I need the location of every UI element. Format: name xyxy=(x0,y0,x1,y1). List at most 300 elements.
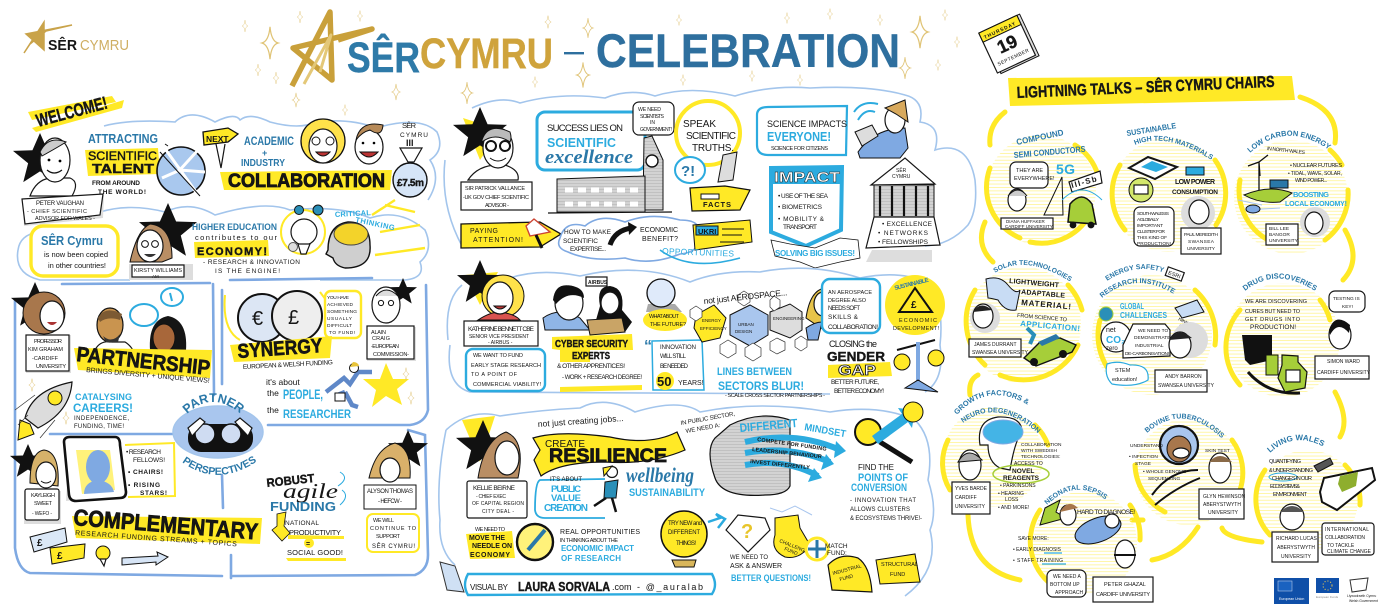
text: novel reagents: • AND MORE! xyxy=(998,505,1029,511)
icon: sustainable economic development xyxy=(885,275,945,335)
icon: next sign xyxy=(203,128,238,168)
bubble: bottom up: APPROACH xyxy=(1055,590,1083,596)
text: quantifying changes: & UNDERSTANDING xyxy=(1269,468,1313,474)
bubble: stem education xyxy=(1106,362,1148,385)
text: nuclear tidal wave xyxy=(1285,163,1347,208)
card: UKRI xyxy=(693,220,752,250)
text: higher education economy xyxy=(192,222,300,275)
text: closing the gender gap: BETTER FUTURE, xyxy=(831,379,879,386)
bubble: Sêr Cymru copied xyxy=(31,226,118,276)
bubble: early stage research: EARLY STAGE RESEARCH xyxy=(471,363,541,369)
icon: wind turbine island xyxy=(1238,155,1292,213)
bubble: scientists in government: IN xyxy=(650,120,655,126)
text: lines between sectors blur: SECTORS BLUR! xyxy=(718,379,804,393)
label: low power consumption xyxy=(1172,167,1218,196)
bubble: they are everywhere: EVERYWHERE! xyxy=(1014,176,1055,182)
text: closing the gender gap: GENDER xyxy=(827,349,886,364)
bubble: continue to support: CONTINUE TO xyxy=(370,526,417,532)
text: lines between sectors blur: - SCALE CROSS SECTOR PARTNERSHIPS - xyxy=(725,393,825,399)
cloud: economic benefit question: BENEFIT? xyxy=(642,236,678,243)
quote: innovation in 50 years: WILL STILL xyxy=(660,354,687,360)
text: ask and answer better questions xyxy=(730,555,811,584)
icon: mindset head with arrows: WE NEED A: xyxy=(685,423,721,435)
icon: parliament and Big Ben xyxy=(548,136,672,213)
text: real opportunities: REAL OPPORTUNITIES xyxy=(560,529,640,536)
text: lightweight adaptable material: APPLICATION! xyxy=(1020,319,1080,333)
shield: impact list: • BIOMETRICS xyxy=(778,204,823,211)
bubble: achieved something: YOU HAVE xyxy=(327,295,349,301)
bubble: international collaboration: CLIMATE CHANGE xyxy=(1327,549,1372,555)
person: Glyn Hewinson: ABERYSTWYTH xyxy=(1203,502,1241,508)
person: Yves Barde: UNIVERSITY xyxy=(955,504,986,510)
icon: speech bubbles xyxy=(130,288,183,326)
icon: production line and bottle xyxy=(1242,335,1307,393)
text: robust agile funding xyxy=(266,471,346,514)
icon: facts folder: FACTS xyxy=(703,200,731,209)
icons: sector hexagons: URBAN xyxy=(738,322,754,327)
person: Alain Craig: CRAIG xyxy=(372,336,390,342)
bubble: achieved something: ACHIEVED xyxy=(327,302,354,308)
text: novel reagents: WITH SWEDISH xyxy=(1021,448,1058,454)
person: Peter Vaughan xyxy=(13,133,104,226)
person: Andy Barron: SWANSEA UNIVERSITY xyxy=(1158,383,1215,389)
shield: impact list: IMPACT xyxy=(774,169,840,186)
talk: growth factors and neurodegeneration: NEURO DEGENERATION xyxy=(960,408,1041,433)
talk: growth factors and neurodegeneration: GROWTH FACTORS & xyxy=(954,390,1028,414)
list: fellows chairs stars: STARS! xyxy=(140,490,167,497)
icon: challenge fund bag: FUND xyxy=(783,546,799,557)
person: Bill Lee: BANGOR xyxy=(1269,232,1290,238)
person: Peter Vaughan: PETER VAUGHAN xyxy=(36,201,84,207)
icon: cow portrait xyxy=(1160,426,1198,464)
person: Professor Kim Graham xyxy=(11,282,71,373)
text: infection and sequencing xyxy=(1129,443,1230,482)
icon: gold star xyxy=(292,12,372,86)
text: academic + industry: + xyxy=(262,148,267,158)
icon: new building xyxy=(1175,300,1204,339)
icon: brain head xyxy=(979,417,1023,470)
credit: visual by Laura Sorvala: .com xyxy=(612,582,632,592)
cloud outline xyxy=(444,87,976,246)
shield: impact list: • USE OF THE SEA xyxy=(778,193,829,200)
list: fellows chairs stars: • CHAIRS! xyxy=(128,469,163,476)
section: lightning talks heading: LIGHTNING TALKS – SÊR CYMRU CHAIRS xyxy=(1016,72,1275,102)
text: lightweight adaptable material: LIGHTWEIGHT xyxy=(1009,278,1060,289)
text: the people, the researcher: PEOPLE, xyxy=(283,386,323,402)
icon: hot air balloon: DIFFERENT xyxy=(668,530,700,536)
text: catalysing careers: FUNDING, TIME! xyxy=(74,424,124,430)
talk: sustainable high tech materials: HIGH TECH MATERIALS xyxy=(1134,136,1213,160)
bubble: South Wales: THIS KIND OF xyxy=(1137,235,1167,241)
bubble: continue to support: WE WILL xyxy=(373,518,394,524)
icon: mindset head with arrows: COMPETE FOR FUNDING xyxy=(757,437,827,453)
card: UKRI: UKRI xyxy=(698,227,716,236)
logo: Sêr Cymru small: SÊR xyxy=(48,36,77,54)
icon: needle gauge xyxy=(466,524,553,560)
text: nuclear tidal wave: • NUCLEAR FUTURES xyxy=(1290,163,1342,169)
person: Alain Craig xyxy=(367,278,417,361)
talk: sustainable high tech materials: SUSTAINABLE xyxy=(1126,121,1177,138)
person: Sir Patrick Vallance xyxy=(453,107,532,210)
text: points of conversion: CONVERSION xyxy=(851,482,907,494)
person: Alyson Thomas: ALYSON THOMAS xyxy=(367,489,413,495)
box: public value creation xyxy=(535,477,605,518)
text: opportunities xyxy=(660,246,740,263)
person: Kirsty Williams AM xyxy=(129,203,197,280)
box: science impacts everyone: SCIENCE FOR CITIZENS xyxy=(771,146,828,152)
quote: innovation in 50 years: 50 xyxy=(657,374,671,389)
icon: net CO2 zero: net xyxy=(1106,327,1116,334)
person: Diana Huffaker: CARDIFF UNIVERSITY xyxy=(1005,224,1053,229)
person: Kirsty Williams AM: AM xyxy=(152,274,159,279)
panel: welcome section xyxy=(13,93,440,280)
person: Diana Huffaker xyxy=(1001,189,1053,229)
talk: compound semiconductors xyxy=(986,127,1102,245)
text: attracting scientific talent: FROM AROUND xyxy=(92,180,140,187)
sign: paying attention: PAYING xyxy=(470,228,498,235)
bubble: achieved something: TO FUND! xyxy=(329,330,355,336)
person: James Durrant: SWANSEA UNIVERSITY xyxy=(972,350,1029,356)
person: James Durrant: JAMES DURRANT xyxy=(974,342,1017,348)
text: infection and sequencing: UNDERSTAND xyxy=(1130,443,1163,449)
banner: complementary: RESEARCH FUNDING STREAMS + TOPICS xyxy=(75,530,237,548)
bubble: stem education: education! xyxy=(1112,377,1138,383)
text: higher education economy: IS THE ENGINE! xyxy=(215,268,280,275)
icon: brain head critical thinking xyxy=(326,200,425,268)
text: lightweight adaptable material xyxy=(1009,278,1080,333)
person: Paul Meredith xyxy=(1181,196,1221,254)
person: Kellie Beirne: CITY DEAL - xyxy=(482,509,514,515)
talk: low carbon energy: IN NORTH WALES xyxy=(1267,146,1306,156)
bubble: early stage research xyxy=(466,349,545,391)
quote: innovation in 50 years xyxy=(644,338,704,390)
text: novel reagents: • PARKINSONS xyxy=(1000,483,1036,489)
icon: running researcher and star xyxy=(326,362,414,407)
icon: globe with arrows xyxy=(157,144,205,196)
icon: green solar car xyxy=(1024,328,1076,366)
icon: facts folder xyxy=(690,152,750,211)
icon: mindset head with arrows: INVEST DIFFERENTLY xyxy=(750,459,810,471)
panel: resilience and research xyxy=(439,402,934,596)
text: the people, the researcher: RESEARCHER xyxy=(283,407,351,421)
person: Yves Barde xyxy=(952,450,990,514)
person: Paul Meredith: UNIVERSITY xyxy=(1187,246,1216,252)
person: Kellie Beirne xyxy=(456,416,527,518)
person: Peter Ghazal: CARDIFF UNIVERSITY xyxy=(1096,592,1150,598)
icon: coins xyxy=(225,291,326,342)
bubble: stem education: STEM xyxy=(1115,368,1131,374)
text: national productivity and social good: = xyxy=(306,541,310,548)
talk: energy safety research institute: RESEARCH INSTITUTE xyxy=(1099,278,1176,298)
text: drug production: GET DRUGS INTO xyxy=(1245,317,1301,323)
title: CYMRU xyxy=(420,30,553,78)
title xyxy=(292,12,900,86)
bubble: they are everywhere xyxy=(1010,162,1055,188)
text: cyber security experts: & OTHER APPRENTICES! xyxy=(557,363,625,370)
text: save more xyxy=(1013,536,1066,564)
icon: net CO2 zero: zero xyxy=(1106,346,1118,352)
text: robust agile funding: agile xyxy=(283,479,338,503)
logos: EU and Welsh Government: European Funds xyxy=(1316,595,1339,599)
text: catalysing careers xyxy=(73,392,133,430)
icon: Sêr Cymru temple: • FELLOWSHIPS xyxy=(878,239,929,246)
icon: industrial fund chest: INDUSTRIAL xyxy=(832,563,862,577)
bubble: bottom up xyxy=(1047,570,1086,597)
bubble: scientists in government xyxy=(633,102,674,135)
icon: mother and baby: HARD TO DIAGNOSE! xyxy=(1077,509,1135,516)
bubble: achieved something xyxy=(325,291,361,338)
list: fellows chairs stars: • RISING xyxy=(128,482,160,489)
bubble: early stage research: WE WANT TO FUND xyxy=(473,353,523,359)
logos: EU and Welsh Government: Llywodraeth Cymru xyxy=(1347,594,1376,598)
person: Peter Vaughan: ADVISOR FOR WALES - xyxy=(35,216,95,222)
text: closing the gender gap: GAP xyxy=(838,362,876,379)
icons: sector hexagons: ENGINEERING xyxy=(773,316,805,321)
icon: new building: building! xyxy=(1177,324,1199,339)
heading: welcome xyxy=(28,93,124,132)
icon: structural fund flag: FUND xyxy=(890,572,905,578)
text: attracting scientific talent xyxy=(85,131,160,196)
banner: partnership: PARTNERSHIP xyxy=(75,343,211,380)
bubble: question marks xyxy=(675,157,705,183)
bubble: scientists in government: WE NEED xyxy=(638,107,661,113)
icon: 5G mast xyxy=(1044,177,1063,215)
icon: Sêr Cymru temple: • NETWORKS xyxy=(878,230,929,237)
icon: needle gauge: MOVE THE xyxy=(469,535,505,542)
text: save more: • EARLY DIAGNOSIS xyxy=(1013,547,1062,553)
person: Andy Barron: ANDY BARRON xyxy=(1165,374,1202,380)
bubble: achieved something: DIFFICULT xyxy=(327,323,352,329)
bubble: industrial decarbonisation: DE-CARBONISATION! xyxy=(1125,351,1169,357)
person: Katherine Bennett: KATHERINE BENNETT CBE xyxy=(468,326,535,333)
person: Glyn Hewinson xyxy=(1199,453,1246,519)
person: Glyn Hewinson: UNIVERSITY xyxy=(1208,510,1239,516)
panel: science and government xyxy=(444,87,976,268)
person: Kellie Beirne: - CHIEF EXEC xyxy=(476,494,506,500)
people: cyber security experts xyxy=(543,277,632,335)
text: the people, the researcher: it's about xyxy=(266,377,300,387)
person: Peter Ghazal: PETER GHAZAL xyxy=(1104,582,1146,588)
icon: satellite and tablet xyxy=(1314,458,1375,510)
sign: paying attention: ATTENTION! xyxy=(473,237,523,244)
text: quantifying changes: CHANGES IN OUR xyxy=(1272,476,1312,482)
text: global challenges: GLOBAL xyxy=(1120,302,1144,311)
text: higher education economy: ECONOMY! xyxy=(197,246,267,258)
credit: visual by Laura Sorvala xyxy=(465,574,715,595)
talk: compound semiconductors: SEMI CONDUCTORS xyxy=(1013,144,1086,160)
panel: partner grid lines xyxy=(15,278,428,578)
icons: sector hexagons: ENERGY xyxy=(702,318,721,323)
icon: sustainable economic development: ECONOMIC xyxy=(899,318,937,324)
ring: speak scientific truths: SPEAK xyxy=(683,119,716,130)
person: aerospace woman xyxy=(806,288,832,340)
icon: mindset head with arrows: DIFFERENT xyxy=(739,416,799,435)
banner: collaboration: COLLABORATION xyxy=(228,171,385,192)
text: infection and sequencing: STAGE xyxy=(1135,461,1151,467)
person: Sir Patrick Vallance: SIR PATRICK VALLANCE xyxy=(465,186,525,192)
icon: runner xyxy=(594,466,618,512)
banner: create resilience xyxy=(533,413,685,476)
text: real opportunities: ECONOMIC IMPACT xyxy=(561,544,634,553)
icon: device and chip xyxy=(1129,157,1177,202)
icons: sector hexagons: DESIGN xyxy=(735,329,752,334)
person: Alain Craig: ALAIN xyxy=(371,330,386,336)
ring: speak scientific truths xyxy=(676,101,740,165)
bubble: Sêr Cymru copied: is now been copied xyxy=(44,250,108,259)
icon: partner perspectives binoculars: PARTNER xyxy=(182,393,244,414)
text: quantifying changes xyxy=(1269,459,1313,498)
person: Professor Kim Graham: PROFESSOR xyxy=(34,339,62,345)
box: science impacts everyone: EVERYONE! xyxy=(767,129,831,144)
text: ask and answer better questions: ASK & ANSWER xyxy=(730,563,782,570)
text: lines between sectors blur xyxy=(717,366,825,399)
person: Professor Kim Graham: UNIVERSITY xyxy=(36,364,66,370)
talk: low carbon energy xyxy=(1234,130,1351,253)
text: infection and sequencing: • WHOLE GENOME xyxy=(1143,469,1186,475)
label: low power consumption: CONSUMPTION xyxy=(1172,189,1218,196)
quote: innovation in 50 years: BE NEEDED xyxy=(660,364,689,370)
text: novel reagents: NOVEL xyxy=(1012,468,1034,475)
text: attracting scientific talent: THE WORLD! xyxy=(98,189,146,196)
cloud: economic benefit question: EXPERTISE... xyxy=(570,246,606,253)
icon: globe xyxy=(1099,307,1113,321)
quote: innovation in 50 years: INNOVATION xyxy=(660,345,696,351)
text: wellbeing sustainability: wellbeing xyxy=(626,463,694,487)
bubble: scientists in government: SCIENTISTS xyxy=(640,114,665,120)
bubble: scientists in government: GOVERNMENT! xyxy=(640,127,672,133)
text: quantifying changes: QUANTIFYING xyxy=(1269,459,1301,465)
bubble: testing is key: KEY! xyxy=(1342,304,1353,310)
quote: innovation in 50 years: YEARS! xyxy=(678,380,704,387)
shield: impact list: • MOBILITY & xyxy=(778,216,825,223)
bubble: achieved something: SOMETHING xyxy=(327,309,357,315)
icon: net CO2 zero: CO₂ xyxy=(1106,335,1125,346)
person: Yves Barde: YVES BARDE xyxy=(955,486,988,492)
text: lightweight adaptable material: MATERIAL! xyxy=(1021,298,1071,311)
text: infection and sequencing: • INFECTION xyxy=(1129,454,1158,460)
text: wellbeing sustainability xyxy=(626,463,706,499)
text: drug production xyxy=(1245,299,1307,331)
text: points of conversion: - INNOVATION THAT xyxy=(850,498,916,504)
person: Kellie Beirne: KELLIE BEIRNE xyxy=(473,485,516,492)
text: quantifying changes: ENVIRONMENT xyxy=(1273,492,1308,498)
icon: coins: £ xyxy=(288,307,299,329)
icon: money bag £7.5m: £7.5m xyxy=(397,178,424,189)
text: wellbeing sustainability: SUSTAINABILITY xyxy=(629,487,706,499)
panel: partnership xyxy=(11,282,212,440)
person: Peter Vaughan: - CHIEF SCIENTIFIC xyxy=(27,209,87,215)
person: Bill Lee xyxy=(1266,207,1330,245)
logo: Sêr Cymru small xyxy=(24,22,129,54)
talk: sustainable high tech materials xyxy=(1110,121,1228,255)
text: cyber security experts: CYBER SECURITY xyxy=(555,338,628,350)
text: robust agile funding: ROBUST xyxy=(266,471,316,490)
person: Alyson Thomas xyxy=(364,430,428,509)
person: Kellie Beirne: OF CAPITAL REGION xyxy=(472,501,524,507)
person: Kayleigh Sweet: SWEET xyxy=(34,501,53,507)
text: infection and sequencing: SKIN TEST xyxy=(1205,448,1230,454)
heading: welcome: WELCOME! xyxy=(34,93,110,131)
text: the people, the researcher: the xyxy=(267,405,279,415)
text: nuclear tidal wave: WIND POWER... xyxy=(1295,178,1327,184)
cloud outlines xyxy=(17,115,440,280)
text: ask and answer better questions: BETTER QUESTIONS! xyxy=(731,573,811,584)
icon: portrait frame xyxy=(64,437,126,501)
bubble: bottom up: BOTTOM UP xyxy=(1050,582,1080,588)
credit: visual by Laura Sorvala: VISUAL BY xyxy=(470,583,509,592)
bubble: soft skills and collaboration: SKILLS & xyxy=(828,314,859,321)
text: catalysing careers: INDEPENDENCE, xyxy=(74,416,129,422)
icon: money bag £7.5m xyxy=(393,121,428,197)
bubble: testing is key: TESTING IS xyxy=(1333,296,1360,302)
icon: crystal ball: THE FUTURE? xyxy=(650,322,686,328)
person: Richard Lucas: ABERYSTWYTH xyxy=(1277,545,1315,551)
text: save more: SAVE MORE: xyxy=(1018,536,1049,542)
person: James Durrant xyxy=(969,303,1029,357)
person: Paul Meredith: SWANSEA xyxy=(1188,239,1215,245)
person: Alain Craig: -EUROPEAN xyxy=(371,344,399,350)
bubble: soft skills and collaboration: DEGREE ALSO xyxy=(828,298,867,304)
person: Kayleigh Sweet: - WEFO - xyxy=(32,511,52,517)
credit: visual by Laura Sorvala: LAURA SORVALA xyxy=(518,579,611,594)
callout: solving big issues: SOLVING BIG ISSUES! xyxy=(775,249,855,258)
bubble: international collaboration xyxy=(1322,523,1374,555)
person: Richard Lucas: RICHARD LUCAS xyxy=(1276,536,1318,542)
icon: bulb with gears xyxy=(281,205,325,254)
icon: hot air balloon: THINGS! xyxy=(676,541,696,547)
icon: industrial fund chest: FUND xyxy=(839,573,854,583)
text: academic + industry: INDUSTRY xyxy=(241,158,285,169)
talk: solar technologies: SOLAR TECHNOLOGIES xyxy=(993,260,1072,281)
text: nuclear tidal wave: LOCAL ECONOMY! xyxy=(1285,201,1347,208)
person: Alyson Thomas: - HEFCW - xyxy=(378,499,402,505)
person: Yves Barde: CARDIFF xyxy=(955,495,977,501)
bubble: they are everywhere: THEY ARE xyxy=(1016,168,1043,174)
icon: sustainable economic development: DEVELOPMENT! xyxy=(893,326,939,332)
text: attracting scientific talent: TALENT xyxy=(92,161,154,176)
label: III-Sb: III-Sb xyxy=(1070,174,1098,190)
text: novel reagents: LOSS xyxy=(1005,497,1019,503)
text: points of conversion xyxy=(850,463,922,522)
person: Simon Ward: CARDIFF UNIVERSITY xyxy=(1317,370,1371,376)
icon: partner perspectives binoculars xyxy=(172,393,264,475)
person: Simon Ward: SIMON WARD xyxy=(1327,359,1360,365)
people: partnership pair xyxy=(95,308,188,362)
talk: energy safety research institute xyxy=(1092,264,1218,395)
icon: match fund xyxy=(806,538,848,560)
people: cyber security experts: AIRBUS xyxy=(588,280,608,286)
icon: green car xyxy=(1062,190,1102,228)
icon: new building: new xyxy=(1177,316,1189,326)
text: closing the gender gap: CLOSING the xyxy=(829,339,877,349)
icons: sector hexagons: EFFICIENCY xyxy=(700,326,727,331)
calendar: Thursday 19 September xyxy=(979,14,1039,75)
text: lightweight adaptable material: FROM SCIENCE TO xyxy=(1017,313,1068,323)
icon: structural fund flag: STRUCTURAL xyxy=(881,562,918,568)
icons: money notes, bulb, arrow xyxy=(30,528,168,566)
person: Sir Patrick Vallance: ADVISOR - xyxy=(485,203,509,209)
title: CELEBRATION xyxy=(596,24,900,77)
bubble: soft skills and collaboration: COLLABORATION! xyxy=(828,324,878,331)
text: opportunities: OPPORTUNITIES xyxy=(662,246,735,259)
bubble: Sêr Cymru copied: SÊR Cymru xyxy=(41,233,103,248)
icon: money bag £7.5m: CYMRU xyxy=(400,132,428,139)
banner: create resilience: CREATE xyxy=(545,439,585,450)
box: public value creation: IT'S ABOUT xyxy=(550,477,582,483)
text: national productivity and social good: NATIONAL xyxy=(285,520,319,527)
text: higher education economy: HIGHER EDUCATION xyxy=(192,222,277,232)
icon: diamond question xyxy=(726,515,770,552)
